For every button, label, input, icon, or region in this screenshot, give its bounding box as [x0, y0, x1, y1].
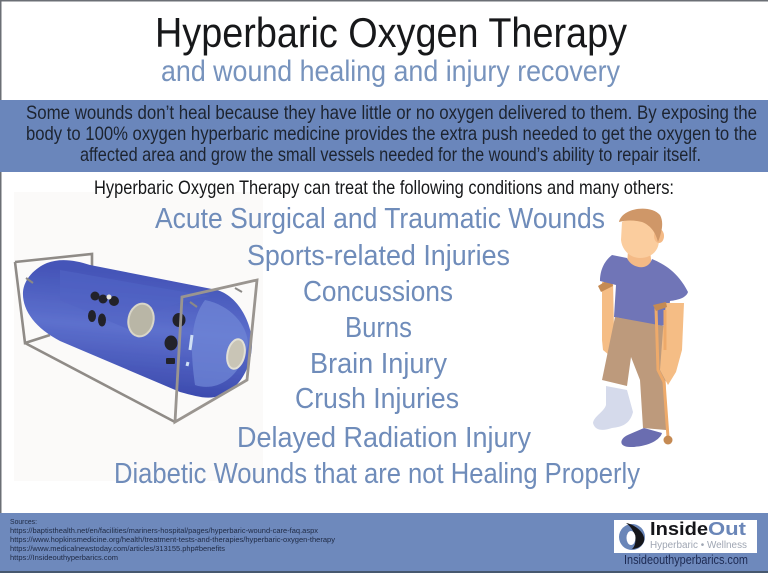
sources: https://baptisthealth.net/en/facilities/mariners-hospital/pages/hyperbaric-wound-care-faq.aspx	[10, 526, 318, 535]
list of conditions: Acute Surgical and Traumatic Wounds	[155, 203, 605, 235]
website: Insideouthyperbarics.com	[624, 552, 748, 567]
icon: man on crutches	[593, 209, 688, 447]
sources	[10, 517, 335, 562]
head	[621, 218, 659, 258]
t-shirt	[600, 255, 688, 326]
sources: https://www.hopkinsmedicine.org/health/treatment-tests-and-therapies/hyperbaric-oxygen-therapy	[10, 535, 335, 544]
neck	[627, 250, 652, 275]
list of conditions: Sports-related Injuries	[247, 240, 510, 272]
list of conditions: Brain Injury	[310, 348, 448, 380]
icon: hyperbaric chamber	[15, 254, 257, 422]
list of conditions: Concussions	[303, 276, 453, 308]
illustration backdrop	[14, 192, 263, 481]
title: Hyperbaric Oxygen Therapy	[155, 9, 627, 56]
list of conditions: Crush Injuries	[295, 383, 459, 415]
conditions intro: Hyperbaric Oxygen Therapy can treat the following conditions and many others:	[94, 177, 674, 199]
rear frame	[15, 254, 175, 422]
list of conditions: Delayed Radiation Injury	[237, 422, 532, 454]
shorts and leg	[602, 317, 666, 430]
crutch pad left	[598, 278, 613, 292]
logo: Out	[708, 519, 746, 539]
far foot cast	[593, 386, 633, 430]
sources: Sources:	[10, 517, 37, 526]
logo mark	[619, 523, 645, 550]
shoe	[621, 428, 662, 447]
porthole: end	[225, 338, 247, 370]
subtitle: and wound healing and injury recovery	[161, 55, 620, 88]
near arm	[660, 303, 684, 385]
list of conditions: Burns	[345, 312, 412, 344]
sources: https://www.medicalnewstoday.com/articles/313155.php#benefits	[10, 544, 225, 553]
logo	[614, 519, 757, 553]
tank body	[23, 260, 252, 398]
logo: Inside	[650, 519, 708, 539]
crutch	[656, 308, 668, 437]
porthole: side	[125, 301, 157, 339]
list of conditions: Diabetic Wounds that are not Healing Properly	[114, 458, 641, 490]
list of conditions	[114, 203, 641, 490]
hair	[619, 209, 662, 242]
panel: intro banner	[0, 100, 768, 172]
front frame	[175, 280, 257, 422]
sources: https://Insideouthyperbarics.com	[10, 553, 118, 562]
logo: Hyperbaric • Wellness	[650, 540, 747, 551]
far arm	[602, 280, 614, 355]
control knobs	[88, 292, 186, 364]
panel: footer	[0, 513, 768, 573]
